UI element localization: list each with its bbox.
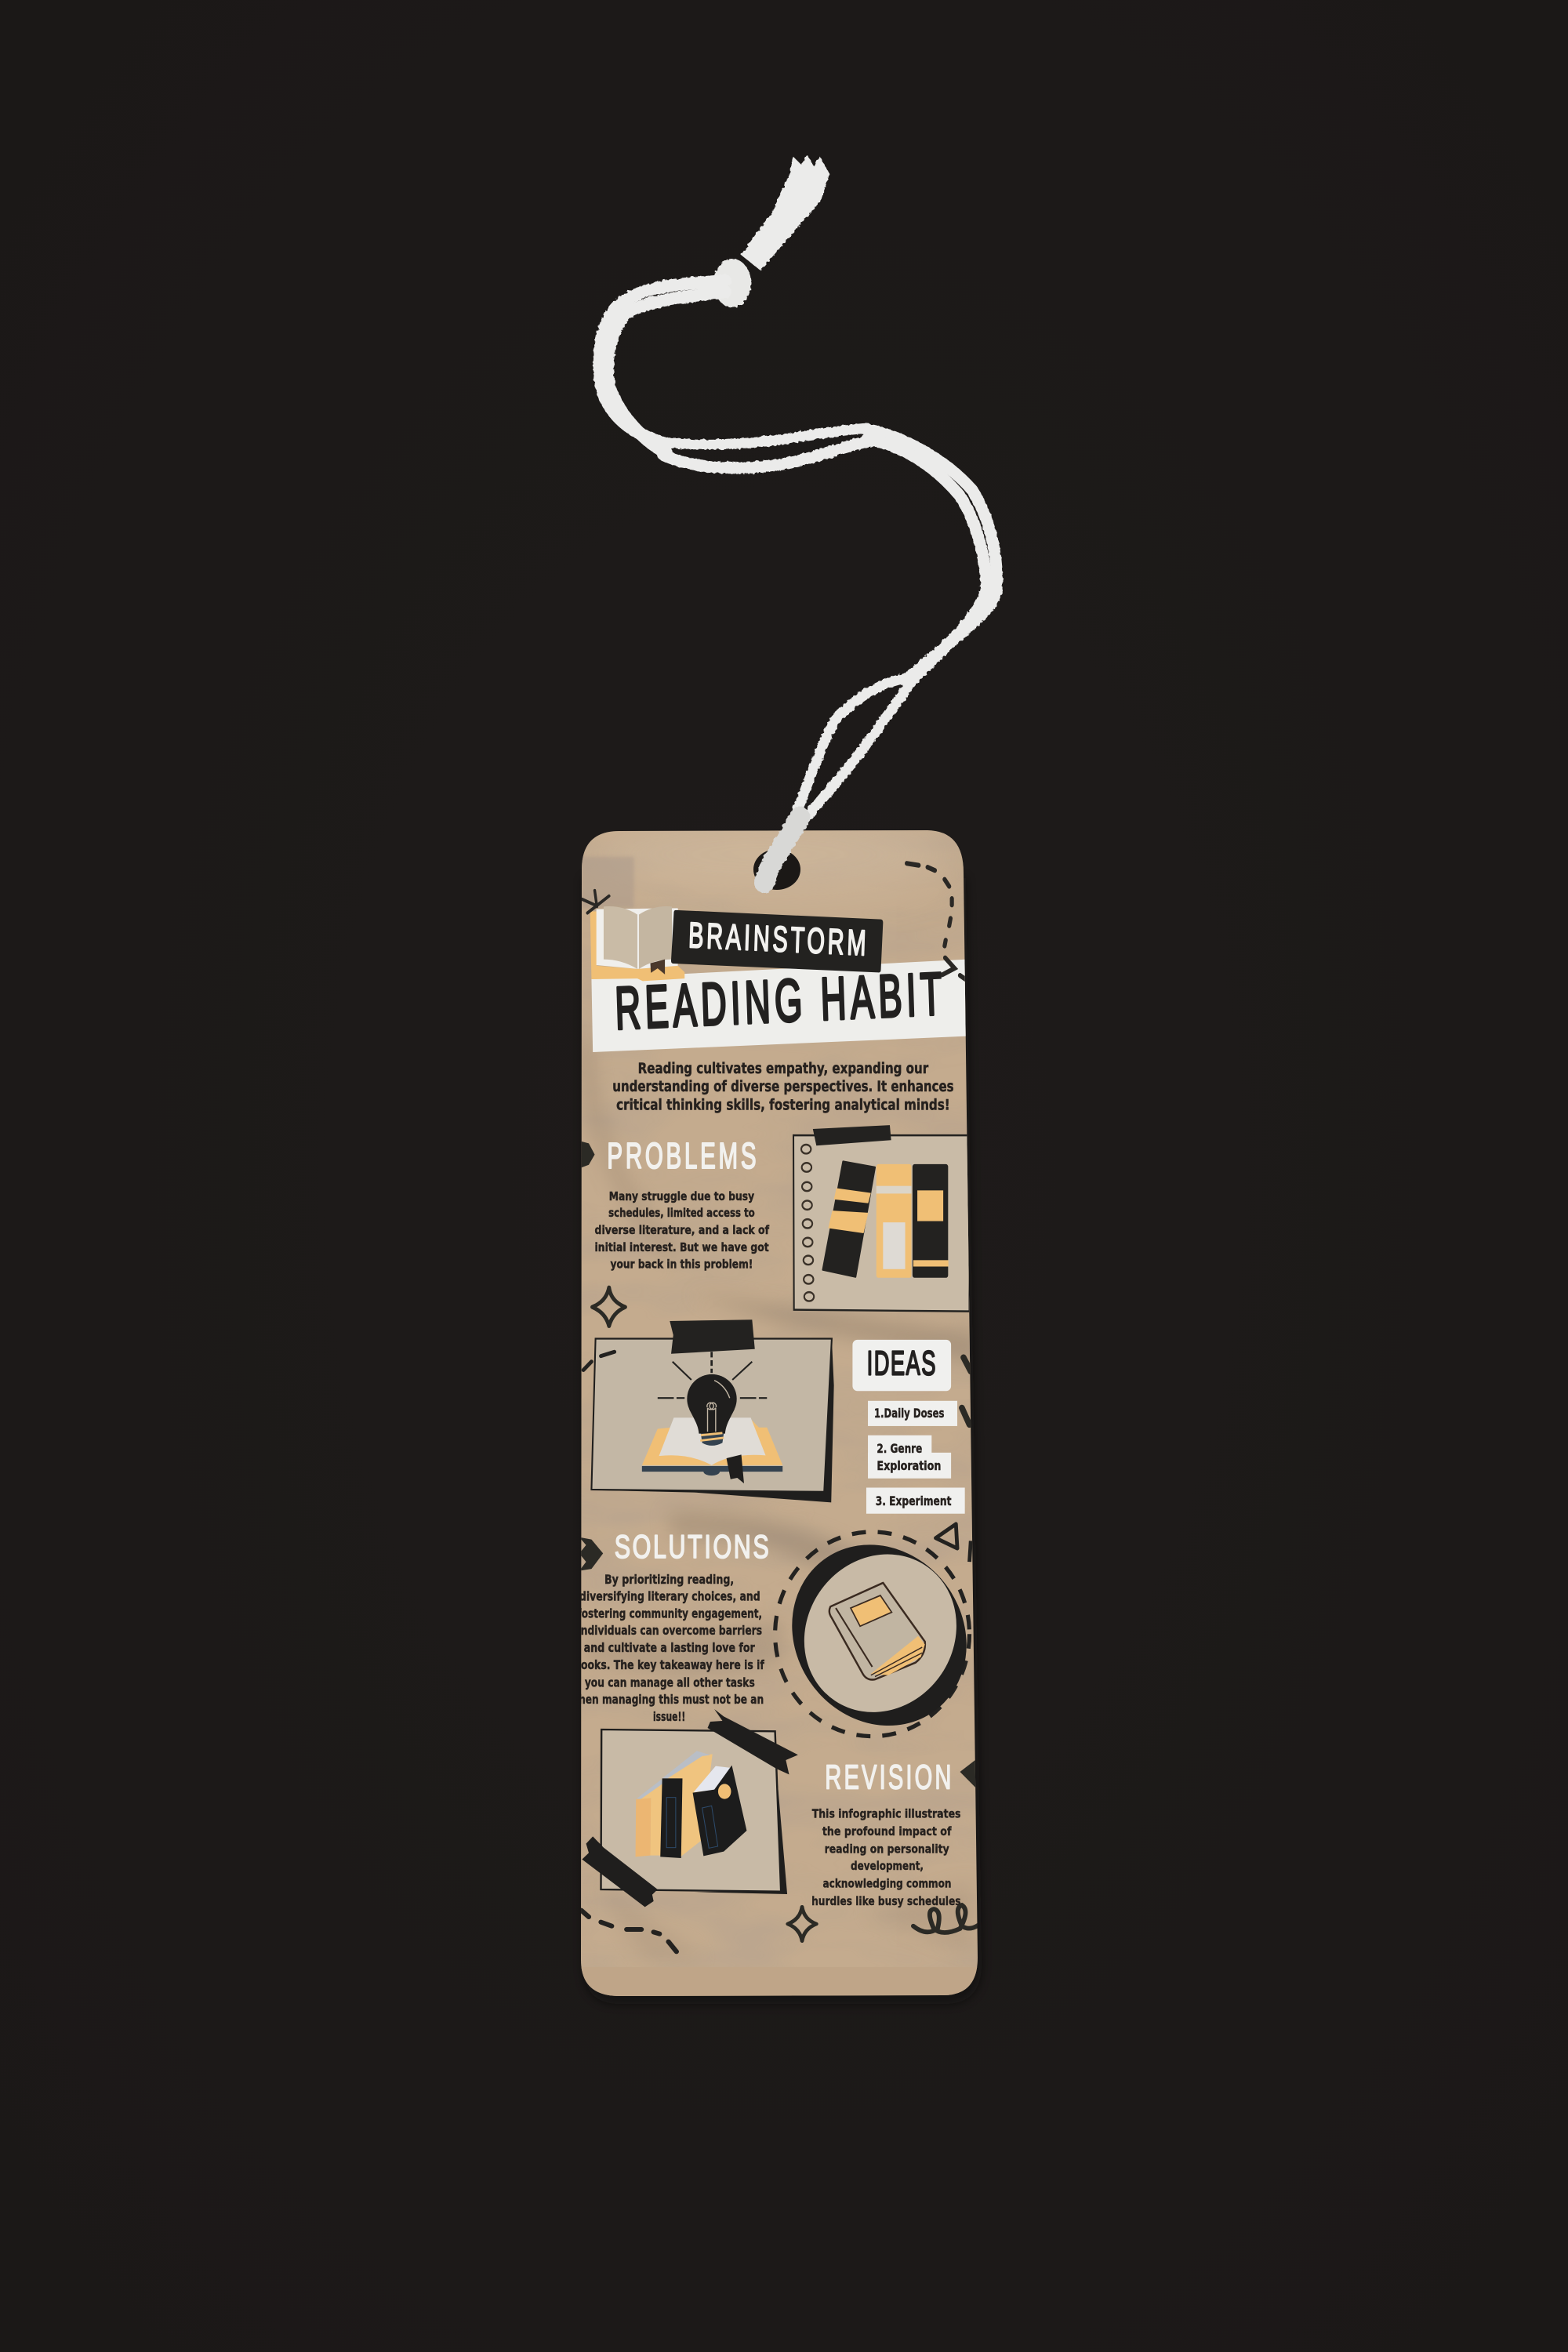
notebook panel with books [793,1125,970,1312]
middle section, drawn in scaled coordinates [581,1286,972,1739]
tape top-right [708,1709,798,1774]
idea 2: 2. Genre [877,1442,922,1456]
thick section [867,430,996,684]
solutions text: By prioritizing reading, [604,1573,734,1587]
book: yellow [877,1164,911,1278]
heading: revision: REVISION [825,1759,951,1796]
tape [670,1319,755,1354]
light rays [658,1352,767,1398]
open book under bulb [642,1417,782,1483]
icon: sparkle bottom [788,1907,816,1941]
top-left shadow patch [581,857,633,908]
problems text: initial interest. But we have got [595,1241,769,1254]
lightbulb panel [583,1319,834,1502]
intro text: critical thinking skills, fostering analytical minds! [616,1097,950,1114]
decorative dashes [583,1352,615,1370]
solutions text: issue!! [653,1710,685,1724]
idea 1: 1.Daily Doses [874,1406,945,1421]
problems text: your back in this problem! [611,1258,753,1272]
icon: star scribble [582,891,609,913]
dashed curve bottom-left [581,1911,677,1951]
revision text: hurdles like busy schedules [811,1894,961,1908]
notebook rings [801,1145,814,1301]
open book icon [590,906,684,981]
paper base [572,823,988,2007]
title band [591,960,967,1052]
problems text: schedules, limited access to [608,1207,755,1221]
book: black [913,1164,949,1278]
strand pair [655,428,867,445]
edge squiggles [962,1357,971,1425]
circular book badge [756,1508,1003,1763]
revision text: development, [851,1859,924,1873]
arrow marker: problems [582,1142,594,1168]
punch hole [753,849,800,890]
icon: closed book [829,1583,925,1679]
idea 1 [868,1401,957,1426]
tape bottom-left [582,1836,658,1907]
problems text [595,1190,770,1272]
lightbulb icon [687,1374,737,1446]
books panel [582,1709,798,1907]
problems text: diverse literature, and a lack of [595,1224,770,1237]
solutions text: when managing this must not be an [570,1693,764,1707]
bottom section, drawn in scaled coordinates [581,1709,979,1951]
title: READING HABIT [614,961,943,1043]
icon: curly squiggle [913,1905,979,1933]
problems text: Many struggle due to busy [609,1190,755,1203]
intro text [612,1061,954,1114]
paper creases [572,815,988,1998]
top section, drawn in scaled coordinates [580,857,970,1312]
idea 2 [868,1436,951,1479]
arrow marker: revision [960,1759,978,1790]
brainstorm label: BRAINSTORM [688,916,866,964]
loop [599,281,725,453]
knot [713,259,751,307]
solutions text: and cultivate a lasting love for [584,1641,755,1655]
solutions text: fostering community engagement, [578,1606,762,1621]
tassel [741,155,829,270]
tape [813,1125,891,1145]
ideas heading [852,1340,951,1391]
books illustration [636,1751,746,1858]
brainstorm label [671,910,883,972]
string with knot and tassel [599,155,996,883]
intro text: understanding of diverse perspectives. It enhances [612,1079,954,1096]
idea 2: Exploration [877,1459,941,1473]
thread into hole [764,817,800,883]
heading: problems: PROBLEMS [607,1137,756,1177]
idea 3 [866,1487,965,1514]
solutions text: diversifying literary choices, and [579,1589,760,1603]
card shadow [583,878,982,2004]
ideas heading: IDEAS [867,1344,935,1382]
dashed curve top-right [907,863,965,979]
solutions text: you can manage all other tasks [585,1675,755,1690]
solutions text: individuals can overcome barriers [578,1624,762,1638]
heading: solutions: SOLUTIONS [615,1528,769,1565]
solutions text: books. The key takeaway here is if [574,1658,764,1672]
arrow marker: solutions [579,1537,603,1571]
idea 3: 3. Experiment [876,1494,952,1508]
revision text: acknowledging common [823,1877,951,1891]
lower strand pair [780,678,906,853]
icon: triangle [935,1524,957,1548]
revision text: the profound impact of [822,1824,952,1838]
solutions text [570,1573,764,1724]
revision text: reading on personality [825,1842,949,1856]
mockup scene: bookmark on dark background [581,155,1004,2004]
intro text: Reading cultivates empathy, expanding our [638,1061,929,1077]
bookmark card [581,830,978,1996]
book: tilted black [823,1162,875,1277]
revision text: This infographic illustrates [812,1807,961,1820]
revision text [811,1807,961,1908]
icon: sparkle [592,1287,625,1326]
